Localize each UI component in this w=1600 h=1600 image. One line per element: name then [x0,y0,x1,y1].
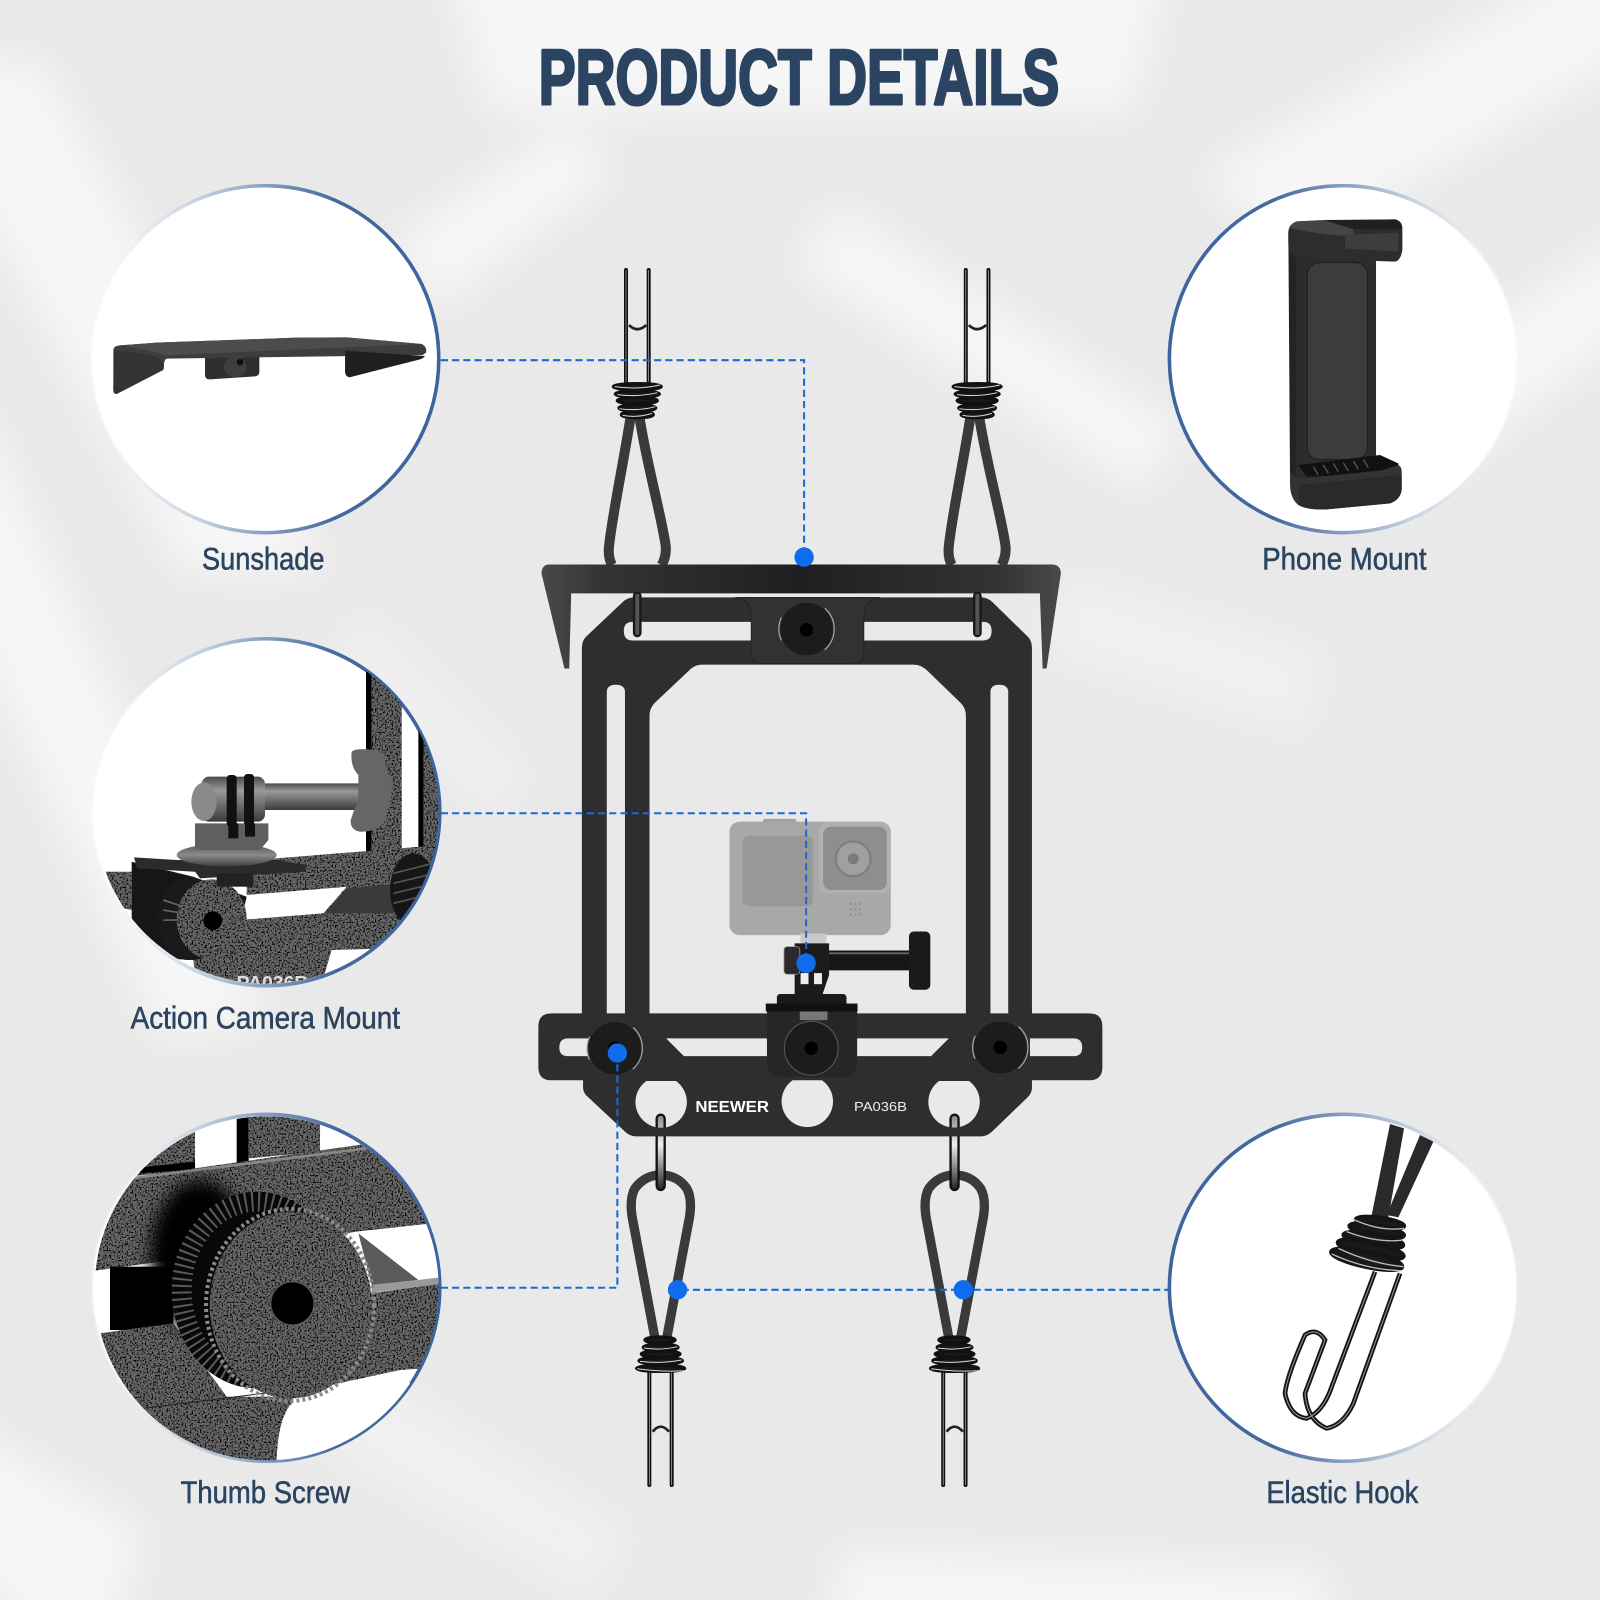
panel: elastic hook [1169,1114,1516,1461]
sunshade [542,565,1061,669]
hanging rings [634,593,981,636]
action mount [766,932,930,1077]
icon: elastic hook [1285,1124,1433,1428]
dashed connector: elastic hook [682,1289,1171,1291]
label: sunshade: Sunshade [202,540,324,576]
detail: action camera mount [93,653,443,994]
panel: phone mount [1169,186,1516,533]
icon: sunshade [113,337,426,394]
detail: action camera mount: PA036B [237,973,308,994]
label: phone mount: Phone Mount [1262,540,1427,576]
elastic hooks: top pair [609,270,1006,565]
detail: thumb screw [87,1113,447,1470]
marker dots [608,547,973,1299]
label: action camera mount: Action Camera Mount [131,1000,400,1036]
model number: PA036B [854,1100,907,1114]
camera ghost [729,819,891,935]
elastic hooks: bottom pair [631,1115,984,1485]
dashed connector: sunshade [441,360,804,551]
frame plate [538,597,1102,1136]
panel: thumb screw [87,1113,447,1470]
panel: sunshade [92,186,439,533]
icon: phone mount [1288,219,1402,509]
top center plate [735,597,880,663]
thumb screws [587,601,1028,1076]
dashed connector: action camera mount [441,813,806,959]
logo: NEEWER [695,1099,770,1116]
title: PRODUCT DETAILS [539,35,1059,121]
panel: action camera mount [93,639,443,994]
label: elastic hook: Elastic Hook [1266,1474,1419,1510]
main mount frame [538,565,1102,1136]
dashed connector: thumb screw [441,1056,617,1288]
label: thumb screw: Thumb Screw [181,1474,350,1510]
